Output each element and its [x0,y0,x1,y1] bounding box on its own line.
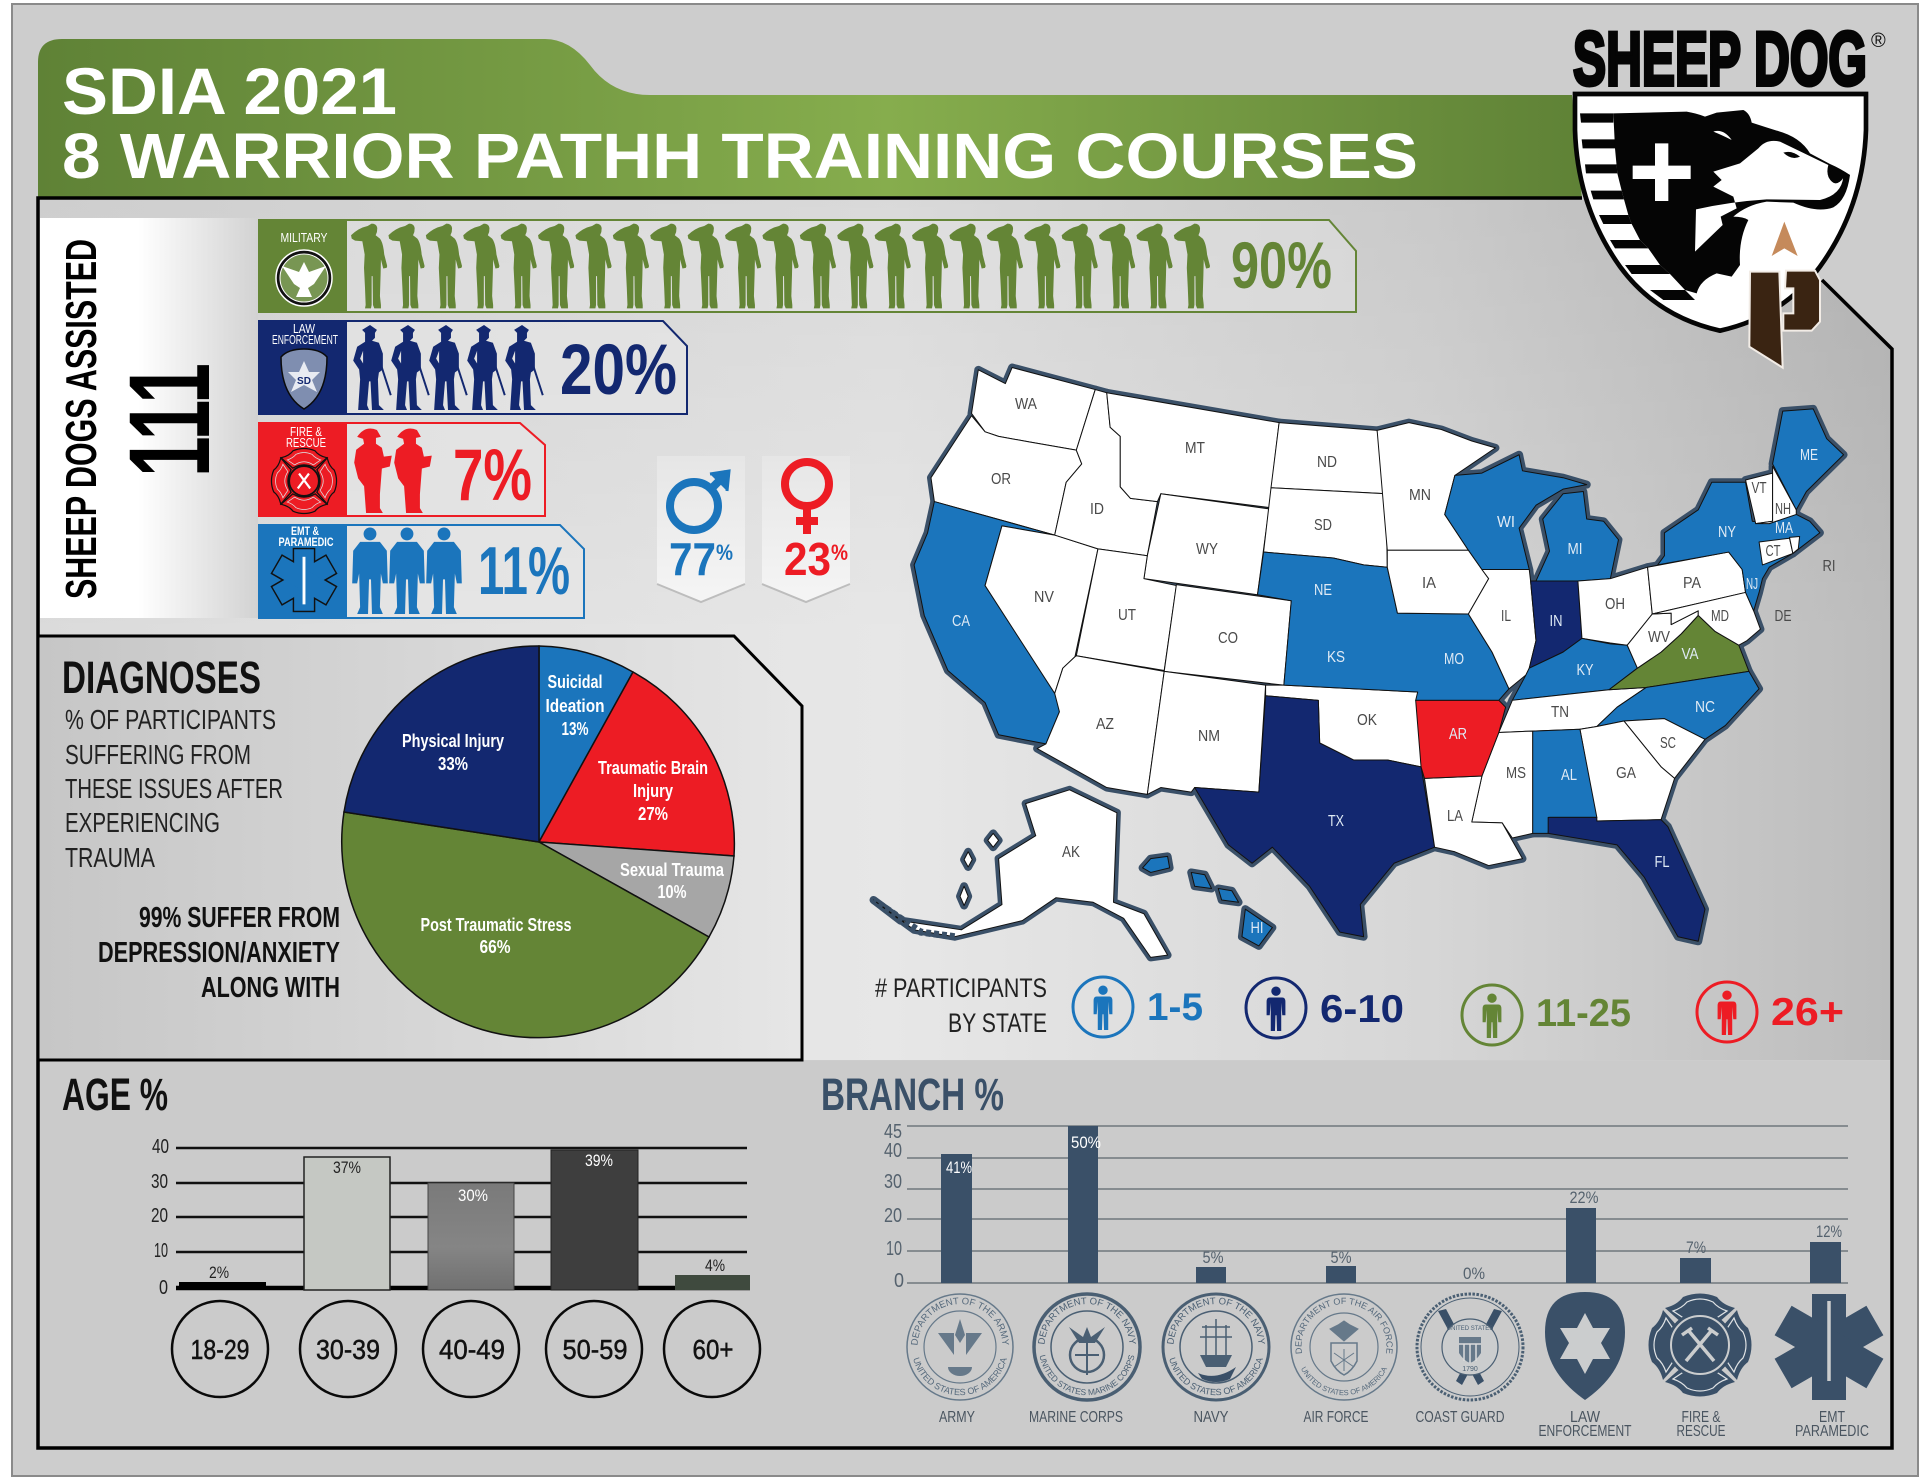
icon: army seal: UNITED STATES OF AMERICA [914,1358,1007,1396]
state labels: MD [1711,608,1729,625]
map of participants by state [874,368,1844,957]
panel: age [62,1069,760,1397]
bar: law enforcement 20%: ENFORCEMENT [272,332,338,347]
icon: air force seal [1290,1293,1398,1401]
cross [1633,143,1691,201]
state labels: WY [1196,541,1218,558]
state labels: AZ [1096,716,1114,733]
icon: law enforcement shield [1545,1292,1625,1400]
registered mark: ® [1871,30,1886,52]
state labels: ND [1317,454,1337,471]
state labels on coloured states: KS [1327,649,1345,666]
icon: EMT star of life [1775,1294,1883,1400]
branch labels: AIR FORCE [1304,1409,1368,1426]
male badge 77%: % [716,540,733,565]
bar: fire and rescue 7%: 7% [453,435,532,516]
age heading: AGE % [62,1069,168,1120]
legend item 11-25 [1462,985,1631,1045]
diagnoses description: THESE ISSUES AFTER [65,773,283,804]
icon: sheriff badge [281,349,327,409]
icon: coast guard seal: 1790 [1462,1366,1478,1373]
age bar chart: 30% [458,1186,488,1205]
state labels: DE [1774,608,1792,625]
branch bar chart: 12% [1816,1222,1842,1241]
bar: fire and rescue 7% [259,422,545,517]
age bar chart: 40 [152,1136,169,1158]
age group labels: 30-39 [316,1334,380,1365]
age bar chart: 37% [333,1158,361,1177]
diagnoses heading: DIAGNOSES [62,652,261,703]
panel: branch [821,1069,1884,1440]
branch bar chart: 0 [894,1270,904,1292]
sheep dogs assisted label: SHEEP DOGS ASSISTED [57,239,106,599]
bar: law enforcement 20% [259,320,687,415]
state labels: ID [1090,501,1104,518]
icon: military seal [276,250,332,306]
branch labels: EMT [1819,1409,1845,1426]
legend item 11-25: 11-25 [1536,992,1631,1035]
shield [1575,94,1866,368]
legend: participants by state [875,973,1844,1045]
icon: coast guard seal: UNITED STATES [1447,1326,1493,1332]
branch labels: RESCUE [1676,1423,1726,1440]
soldier silhouettes [351,224,1210,308]
state labels [991,396,1836,861]
icon: male symbol [670,471,729,530]
pie chart: Suicidal [548,672,602,692]
state labels on coloured states: MA [1775,520,1793,537]
branch labels: FIRE & [1682,1409,1721,1426]
pie chart: Injury [633,781,673,801]
pie chart [342,646,734,1038]
state labels on coloured states: ME [1800,447,1818,464]
age bar chart: 20 [151,1205,168,1227]
icon: air force seal: UNITED STATES OF AMERICA [1302,1366,1388,1396]
age group labels: 50-59 [562,1334,628,1365]
111 count: 111 [106,363,234,477]
diagnoses description: % OF PARTICIPANTS [65,704,276,735]
state labels: MS [1506,765,1526,782]
pie chart: 13% [562,719,588,739]
state labels on coloured states: MO [1444,651,1464,668]
branch bar chart: 20 [884,1205,902,1227]
age bar chart: 10 [154,1240,168,1262]
age bar chart: 0 [159,1277,168,1299]
icon: army seal [906,1293,1014,1401]
bar: EMT and paramedic 11%: EMT & [291,524,319,538]
bar: EMT and paramedic 11%: 11% [478,533,570,609]
police silhouettes [353,325,543,410]
branch heading: BRANCH % [821,1069,1004,1120]
female badge 23%: % [831,540,848,565]
state labels: OH [1605,596,1625,613]
state labels: VT [1752,480,1767,497]
panel: diagnoses [38,636,802,1060]
state labels: NV [1034,589,1054,606]
branch bar chart: 41% [946,1158,972,1177]
title line 1: SDIA 2021 [62,54,397,128]
state labels: TN [1551,704,1569,721]
logo: sheep dog [1573,17,1886,368]
age group labels: 18-29 [190,1334,250,1365]
state labels on coloured states: NY [1718,524,1736,541]
icon: fire and rescue cross [1648,1294,1752,1396]
state labels on coloured states: FL [1654,854,1670,871]
legend item 1-5: 1-5 [1147,986,1203,1029]
state labels on coloured states: TX [1328,813,1344,830]
state labels: RI [1822,558,1836,575]
state labels on coloured states: CA [952,613,970,630]
state labels: CO [1218,630,1238,647]
age bar chart: 4% [705,1256,725,1275]
bar: EMT and paramedic 11% [259,524,584,619]
pie chart: Sexual Trauma [620,860,725,880]
age group labels: 60+ [692,1334,734,1365]
female badge 23% [762,456,850,602]
depression and anxiety callout: 99% SUFFER FROM [139,902,340,934]
age group labels [190,1334,734,1365]
legend: participants by state: BY STATE [948,1008,1047,1038]
branch bar chart: 45 [884,1121,902,1143]
legend item 6-10: 6-10 [1320,988,1404,1031]
state labels: IL [1501,608,1511,625]
state labels on coloured states: AL [1561,767,1577,784]
state labels: OK [1357,712,1377,729]
state labels: UT [1118,607,1136,624]
icon: star of life [272,549,336,611]
state labels on coloured states: NC [1695,699,1715,716]
legend: participants by state: # PARTICIPANTS [875,973,1047,1003]
state labels on coloured states: KY [1576,662,1594,679]
bar: military 90%: 90% [1231,228,1332,302]
state labels on coloured states: NE [1314,582,1332,599]
age bar chart: 39% [585,1151,613,1170]
icon: fire cross [272,449,336,513]
pie chart: 33% [438,754,468,774]
icon: female symbol [785,462,829,534]
icon: marine corps seal [1032,1292,1142,1402]
branch labels: NAVY [1194,1409,1229,1426]
age bar chart [151,1136,750,1299]
state labels on coloured states: HI [1250,920,1264,937]
icon: air force seal: DEPARTMENT OF THE AIR FORCE [1295,1298,1393,1354]
branch bar chart: 0% [1463,1264,1485,1283]
state labels on coloured states: VA [1682,646,1699,663]
pie chart: 10% [658,882,686,902]
bar: fire and rescue 7%: RESCUE [286,435,326,450]
state labels: LA [1447,808,1463,825]
state labels on coloured states [952,447,1818,937]
state labels: CT [1766,543,1781,560]
depression and anxiety callout [98,902,340,1004]
icon: navy seal [1162,1292,1270,1402]
diagnoses description [65,704,283,873]
branch bar chart: 5% [1330,1248,1352,1267]
state labels on coloured states: NJ [1746,576,1758,593]
state labels: WV [1648,629,1670,646]
legend item 1-5 [1073,977,1203,1037]
branch labels: ARMY [939,1409,975,1426]
state labels: GA [1616,765,1636,782]
branch bar chart: 30 [884,1171,902,1193]
bar: law enforcement 20%: LAW [293,321,316,336]
title line 2: 8 WARRIOR PATHH TRAINING COURSES [62,120,1418,192]
depression and anxiety callout: DEPRESSION/ANXIETY [98,937,340,969]
age bar chart: 2% [209,1263,229,1282]
diagnoses description: EXPERIENCING [65,807,220,838]
state labels on coloured states: MI [1568,541,1582,558]
icon: marine corps seal: UNITED STATES MARINE CORPS [1040,1354,1134,1396]
female badge 23%: 23 [784,533,831,585]
male badge 77%: 77 [669,533,716,585]
paramedic silhouettes [352,527,462,614]
male badge 77% [657,456,745,602]
state labels: NH [1775,501,1791,518]
branch bar chart: 22% [1570,1188,1598,1207]
branch labels: LAW [1570,1409,1601,1426]
branch labels [939,1409,1869,1440]
branch labels: COAST GUARD [1416,1409,1504,1426]
state labels: WA [1015,396,1037,413]
arrowhead [1772,222,1798,256]
pie chart: Traumatic Brain [598,758,708,778]
bar: military 90%: MILITARY [280,230,328,245]
pie chart: Ideation [546,696,604,716]
legend item 26+: 26+ [1771,991,1844,1034]
branch bar chart: 40 [884,1140,902,1162]
bar: military 90% [259,219,1356,313]
state labels: SC [1660,735,1676,752]
map shapes [874,368,1844,957]
pie chart: 66% [480,937,510,957]
state labels: AK [1062,844,1080,861]
state labels: SD [1314,517,1332,534]
age group labels: 40-49 [439,1334,505,1365]
pie chart: Physical Injury [402,731,504,751]
state labels on coloured states: AR [1449,726,1467,743]
icon: sheriff badge: SD [297,376,311,387]
age bar chart: 30 [151,1171,168,1193]
state labels: OR [991,471,1011,488]
icon: army seal: DEPARTMENT OF THE ARMY [911,1298,1010,1345]
state labels: IA [1422,575,1436,592]
icon: marine corps seal: DEPARTMENT OF THE NAVY [1038,1298,1136,1344]
branch bar chart: 7% [1686,1238,1706,1257]
branch bar chart [884,1121,1848,1292]
age group circles [172,1301,760,1397]
depression and anxiety callout: ALONG WITH [201,972,340,1004]
bar: EMT and paramedic 11%: PARAMEDIC [278,535,334,549]
branch labels: ENFORCEMENT [1538,1423,1632,1440]
state labels: MT [1185,440,1205,457]
state labels: NM [1198,728,1220,745]
legend item 26+ [1697,982,1844,1042]
bar: fire and rescue 7%: FIRE & [290,424,322,439]
bar: law enforcement 20%: 20% [560,331,677,410]
icon: coast guard seal [1417,1294,1523,1400]
icon: navy seal: DEPARTMENT OF THE NAVY [1167,1298,1266,1344]
diagnoses description: TRAUMA [65,842,155,873]
state labels: MN [1409,487,1431,504]
branch labels: PARAMEDIC [1795,1423,1869,1440]
state labels on coloured states: IN [1550,613,1562,630]
diagnoses description: SUFFERING FROM [65,739,251,770]
title banner [38,39,1582,198]
panel: sheep dogs assisted [40,218,258,618]
branch bar chart: 50% [1071,1133,1101,1152]
branch bar chart: 5% [1202,1248,1224,1267]
state labels on coloured states: WI [1497,514,1515,531]
firefighter silhouettes [354,428,432,513]
legend item 6-10 [1246,978,1404,1038]
state labels: PA [1683,575,1701,592]
icon: navy seal: UNITED STATES OF AMERICA [1170,1357,1263,1396]
branch labels: MARINE CORPS [1029,1409,1123,1426]
pie chart: 27% [638,804,668,824]
pie chart: Post Traumatic Stress [420,915,572,935]
P mark [1749,271,1820,368]
branch bar chart: 10 [886,1238,902,1260]
